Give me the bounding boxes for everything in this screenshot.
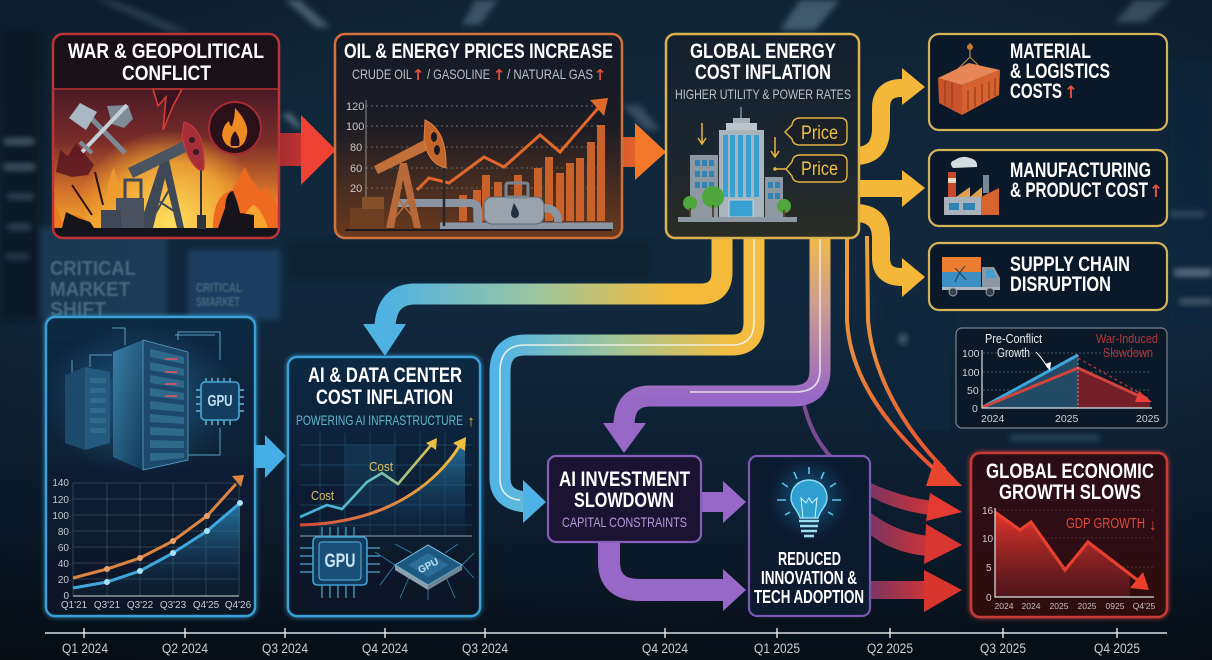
chart: oil price bars and trend: [346, 98, 608, 228]
label: pre-conflict growth: [985, 331, 1042, 360]
panel: material and logistics costs: [929, 34, 1167, 130]
chart: GDP growth decline: [982, 506, 1157, 611]
chart: GDP growth decline: ↓: [1149, 517, 1157, 534]
timeline: [45, 628, 1167, 656]
arrows: innovation to global growth: [866, 481, 962, 612]
subheading: [352, 66, 606, 84]
heading: GROWTH SLOWS: [999, 481, 1141, 504]
chart: GDP growth decline: 0925: [1106, 601, 1125, 611]
icon: crossed swords and hammer: [69, 103, 133, 153]
axis labels: 2024: [981, 413, 1005, 425]
text: & PRODUCT COST: [1010, 179, 1148, 202]
chart: pre-conflict versus war-induced growth: [956, 328, 1167, 428]
arrow: investment to innovation: [698, 481, 746, 523]
text: & LOGISTICS: [1010, 60, 1110, 83]
heading: OIL & ENERGY PRICES INCREASE: [344, 40, 613, 63]
timeline: Q4 2025: [1094, 641, 1140, 656]
heading: [986, 460, 1154, 504]
panel: AI investment slowdown: SLOWDOWN: [574, 489, 674, 512]
icon: isometric chip: [375, 544, 474, 600]
chart: cost curves: Cost: [311, 488, 334, 503]
chart: cost curves: [300, 433, 472, 536]
icon: down arrows: [698, 123, 779, 157]
chart: rising cost lines: Q1'21: [61, 600, 88, 611]
icon: lightning speech notch: [153, 89, 182, 130]
timeline: Q1 2025: [754, 641, 800, 656]
chart: rising cost lines: Q3'22: [127, 600, 154, 611]
icon: pumpjack and pipeline: [345, 120, 613, 230]
subheading: ↑: [412, 66, 424, 84]
chart: oil price bars and trend: 80: [350, 142, 362, 154]
chart: GDP growth decline: 16: [982, 506, 994, 517]
heading: COST INFLATION: [316, 386, 453, 409]
chart: rising cost lines: 60: [58, 543, 69, 554]
arrow: oil to energy: [620, 123, 666, 180]
panel: war and geopolitical conflict: [52, 32, 280, 240]
panel: AI investment slowdown: CAPITAL CONSTRAINTS: [562, 514, 687, 530]
arrow: energy to AI data center cost: [363, 236, 722, 356]
text: TECH ADOPTION: [754, 586, 864, 607]
chart: rising cost lines: [52, 475, 252, 611]
subheading: / GASOLINE: [427, 66, 490, 82]
subheading: ↑: [594, 66, 606, 84]
arrow: energy to supply chain: [855, 213, 925, 297]
timeline: Q4 2024: [642, 641, 688, 656]
faint words on background screens: CRITICAL: [50, 258, 136, 280]
chart: rising cost lines: 140: [52, 478, 69, 489]
text: DISRUPTION: [1010, 273, 1111, 296]
heading: COST INFLATION: [695, 61, 831, 84]
panel: oil and energy prices: [335, 34, 622, 238]
icon: isometric chip: GPU: [417, 556, 441, 576]
icon: GPU chip: [196, 378, 244, 425]
timeline: Q4 2024: [362, 641, 408, 656]
axis labels: 2025: [1055, 413, 1079, 425]
panel: reduced innovation and tech adoption: [749, 456, 870, 616]
chart: oil price bars and trend: 20: [350, 183, 362, 195]
heading: [68, 40, 264, 85]
panel: AI investment slowdown: [548, 456, 701, 542]
price tag: Price: [801, 159, 838, 180]
text: INNOVATION &: [761, 567, 857, 588]
icon: office buildings: [678, 107, 797, 222]
chart: rising cost lines: 40: [58, 559, 69, 570]
faint words on background screens: SMARKET: [196, 294, 240, 309]
timeline: Q1 2024: [62, 641, 108, 656]
chart: GDP growth decline: 2024: [1022, 601, 1041, 611]
chart: oil price bars and trend: 120: [346, 101, 364, 113]
panel: global energy cost inflation: [666, 34, 859, 238]
subheading: ↑: [493, 66, 505, 84]
arrow: war to oil: [278, 115, 336, 185]
chart: GDP growth decline: Q4'25: [1133, 601, 1155, 611]
subheading: HIGHER UTILITY & POWER RATES: [675, 86, 851, 102]
axis labels: 2025: [1136, 413, 1160, 425]
icon: delivery truck: [942, 257, 1000, 296]
heading: CONFLICT: [122, 62, 211, 85]
chart: rising cost lines: Q3'21: [94, 600, 121, 611]
text: [1010, 159, 1163, 202]
panel: supply chain disruption: [929, 243, 1167, 310]
axis labels: [962, 348, 1160, 425]
text: [1010, 253, 1130, 296]
chart: GDP growth decline: 2024: [995, 601, 1014, 611]
icon: factory: [944, 157, 999, 215]
text: COSTS: [1010, 80, 1062, 103]
axis labels: 50: [967, 385, 979, 397]
text: MATERIAL: [1010, 40, 1091, 63]
faint words on background screens: CRITICAL: [196, 280, 242, 295]
icon: GPU chip: GPU: [208, 393, 232, 410]
heading: AI & DATA CENTER: [308, 364, 462, 387]
text: [754, 548, 864, 607]
text: ↑: [1149, 182, 1163, 202]
subheading: ↑: [467, 413, 475, 430]
chart: rising cost lines: Q4'25: [193, 600, 220, 611]
heading: GLOBAL ENERGY: [690, 40, 836, 63]
timeline: Q3 2024: [262, 641, 308, 656]
subheading: CRUDE OIL: [352, 66, 412, 82]
timeline: Q2 2025: [867, 641, 913, 656]
arrow: energy to AI investment: [500, 236, 754, 523]
text: MANUFACTURING: [1010, 159, 1151, 182]
panel: AI and data center cost inflation: [288, 357, 480, 616]
label: war-induced slowdown: [1096, 331, 1158, 360]
chart: rising cost lines: 80: [58, 527, 69, 538]
chart: oil price bars and trend: 60: [350, 163, 362, 175]
axis labels: 100: [962, 348, 980, 360]
chart: cost curves: Cost: [369, 459, 393, 474]
icon: GPU chip: [300, 527, 380, 598]
chart: GDP growth decline: 5: [986, 563, 992, 574]
chart: rising cost lines: 20: [58, 575, 69, 586]
text: SUPPLY CHAIN: [1010, 253, 1130, 276]
heading: [690, 40, 836, 84]
arrow: energy to manufacturing: [855, 170, 925, 207]
text: [1010, 40, 1110, 103]
timeline: Q3 2024: [462, 641, 508, 656]
faint words on background screens: SHIFT: [50, 299, 106, 321]
panel: data center servers and cost chart: [40, 317, 255, 616]
panel: AI investment slowdown: AI INVESTMENT: [559, 468, 690, 491]
text: ↑: [1064, 83, 1078, 103]
timeline: Q2 2024: [162, 641, 208, 656]
faint words on background screens: [50, 258, 242, 321]
label: war-induced slowdown: Slowdown: [1103, 345, 1153, 360]
icon: light bulb: [777, 467, 841, 536]
chart: GDP growth decline: 2025: [1078, 601, 1097, 611]
icon: server racks: [65, 328, 220, 470]
chart: GDP growth decline: 10: [982, 534, 994, 545]
chart: rising cost lines: Q3'23: [160, 600, 187, 611]
axis labels: 100: [962, 367, 980, 379]
chart: rising cost lines: Q4'26: [225, 600, 252, 611]
price tag: Price: [801, 123, 838, 144]
arrow: energy to AI investment, purple: [603, 236, 832, 458]
panel: manufacturing and product cost: [929, 150, 1167, 226]
panel: global economic growth slows: [971, 453, 1167, 617]
axis labels: 0: [972, 403, 978, 415]
chart: rising cost lines: 0: [63, 591, 69, 602]
timeline: Q3 2025: [980, 641, 1026, 656]
faint words on background screens: MARKET: [50, 279, 130, 301]
arrow: servers to data center cost: [254, 435, 286, 478]
chart: GDP growth decline: 0: [986, 593, 992, 604]
chart: GDP growth decline: 2025: [1050, 601, 1069, 611]
label: pre-conflict growth: Pre-Conflict: [985, 331, 1042, 346]
heading: [308, 364, 462, 409]
subheading: / NATURAL GAS: [507, 66, 593, 82]
chart: oil price bars and trend: 100: [346, 121, 364, 133]
subheading: POWERING AI INFRASTRUCTURE: [296, 412, 463, 428]
arrow: energy to materials: [855, 68, 925, 156]
price tag: [785, 118, 847, 145]
icon: flame badge: [209, 102, 261, 154]
icon: GPU chip: GPU: [324, 551, 356, 572]
price tag: [773, 155, 847, 182]
heading: GLOBAL ECONOMIC: [986, 460, 1154, 483]
icon: oil pumpjack: [62, 122, 254, 229]
heading: WAR & GEOPOLITICAL: [68, 40, 264, 63]
chart: rising cost lines: 120: [52, 495, 69, 506]
text: REDUCED: [778, 548, 841, 569]
chart: GDP growth decline: GDP GROWTH: [1066, 516, 1145, 532]
label: pre-conflict growth: Growth: [997, 345, 1030, 360]
arrow: energy to global growth, thin lines: [847, 236, 962, 486]
label: war-induced slowdown: War-Induced: [1096, 331, 1158, 346]
arrow: investment down to innovation: [609, 540, 746, 611]
chart: rising cost lines: 100: [52, 511, 69, 522]
icon: shipping container: [938, 43, 1000, 115]
